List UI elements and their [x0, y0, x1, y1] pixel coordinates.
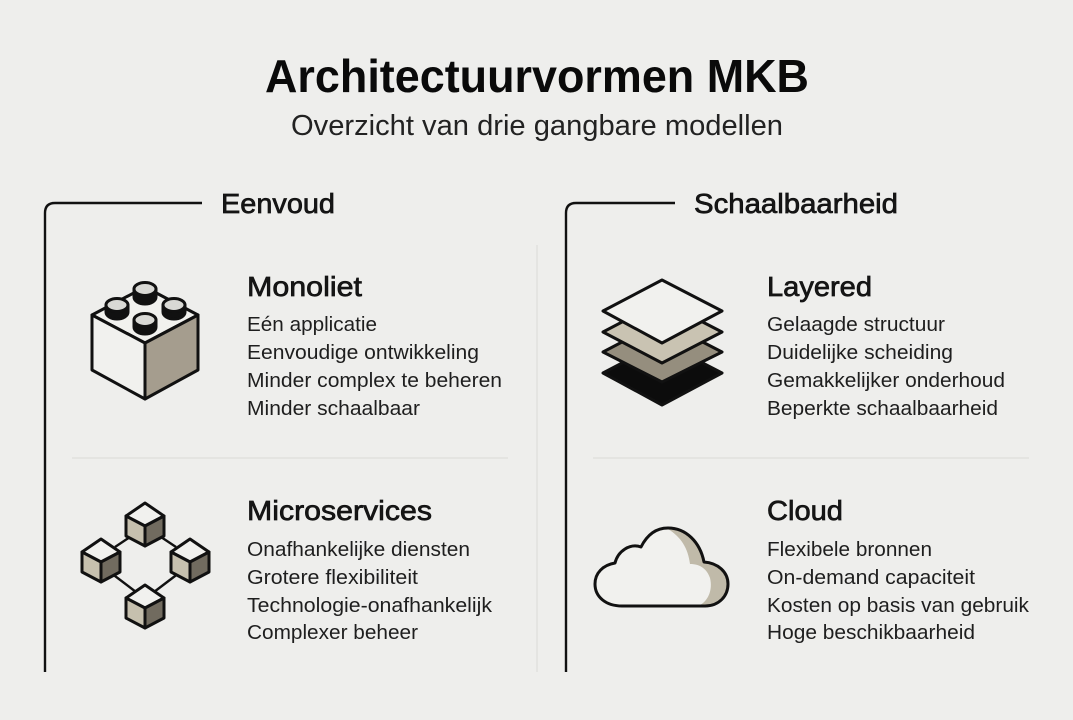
text: Monoliet: Monoliet: [247, 271, 362, 302]
text: Microservices: Complexer beheer: [247, 621, 418, 644]
text: Layered: Beperkte schaalbaarheid: [767, 397, 998, 420]
text: Monoliet: Minder schaalbaar: [247, 397, 420, 420]
heading: Schaalbaarheid: Schaalbaarheid: [694, 188, 898, 219]
text: Microservices: Onafhankelijke diensten: [247, 538, 470, 561]
text: Monoliet: [247, 271, 502, 420]
text: Microservices: [247, 495, 493, 644]
text: Layered: Duidelijke scheiding: [767, 341, 953, 364]
text: Microservices: Technologie-onafhankelijk: [247, 594, 493, 617]
text: Cloud: Hoge beschikbaarheid: [767, 621, 975, 644]
text: Cloud: Flexibele bronnen: [767, 538, 932, 561]
bracket: Eenvoud column: [45, 203, 202, 672]
icon: cloud: [595, 528, 728, 606]
icon: brick: [92, 282, 198, 399]
text: Microservices: Grotere flexibiliteit: [247, 566, 418, 589]
text: Layered: [767, 271, 1005, 420]
text: Monoliet: Minder complex te beheren: [247, 369, 502, 392]
title: Architectuurvormen MKB: [265, 50, 809, 102]
bracket: Schaalbaarheid column: [566, 203, 675, 672]
text: Cloud: Kosten op basis van gebruik: [767, 594, 1030, 617]
text: Microservices: Microservices: [247, 495, 432, 526]
text: Cloud: On-demand capaciteit: [767, 566, 975, 589]
text: Layered: Layered: [767, 271, 872, 302]
text: Layered: Gelaagde structuur: [767, 313, 945, 336]
text: Layered: Gemakkelijker onderhoud: [767, 369, 1005, 392]
text: Monoliet: Eenvoudige ontwikkeling: [247, 341, 479, 364]
text: Cloud: [767, 495, 1030, 644]
icon: connected cubes: [82, 503, 209, 628]
text: Cloud: Cloud: [767, 495, 843, 526]
heading: Eenvoud: Eenvoud: [221, 188, 335, 219]
subtitle: Overzicht van drie gangbare modellen: [291, 110, 783, 142]
text: Monoliet: Eén applicatie: [247, 313, 377, 336]
icon: layers: [603, 280, 722, 405]
